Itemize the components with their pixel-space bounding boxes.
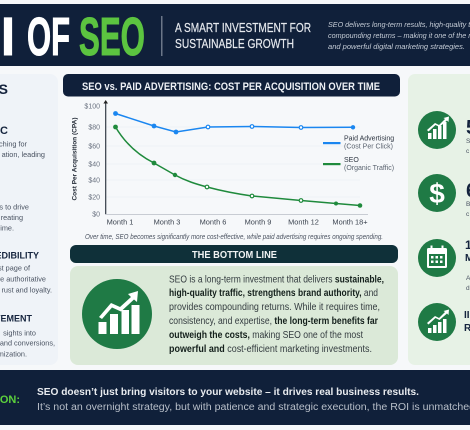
benefit: traffic xyxy=(0,125,45,159)
subtitle xyxy=(175,21,311,51)
stat: roi xyxy=(418,111,470,155)
stat: roi: c xyxy=(466,148,470,155)
benefit: improvement xyxy=(0,314,55,358)
panel: key stats (right) xyxy=(408,74,470,365)
icon: dollar: $ xyxy=(429,178,445,209)
x axis labels: Month 1 xyxy=(107,218,133,226)
title: SEO xyxy=(79,7,145,67)
benefit: traffic: ation, leading xyxy=(2,150,45,159)
legend: (Cost Per Click) xyxy=(344,144,393,150)
x axis labels xyxy=(107,218,368,226)
bottom line heading xyxy=(70,245,398,263)
bottom line text: powerful and cost-efficient marketing investments. xyxy=(169,344,372,355)
benefit: compounding: reating xyxy=(1,213,23,222)
y axis xyxy=(72,100,368,218)
y axis: $60 xyxy=(88,144,100,150)
benefit: traffic: C xyxy=(0,125,8,137)
title: OF xyxy=(27,7,70,67)
stat: returns xyxy=(418,303,470,341)
stat: returns: II xyxy=(464,310,470,321)
header description xyxy=(328,20,470,51)
legend: SEO xyxy=(344,157,359,164)
benefit: improvement: sights into xyxy=(3,328,36,338)
footer text: SEO doesn’t just bring visitors to your website – it drives real business results. xyxy=(37,387,419,398)
icon: growth chart small xyxy=(418,111,456,149)
chart heading: SEO vs. PAID ADVERTISING: COST PER ACQUISITION OVER TIME xyxy=(82,81,380,93)
stat: timeline xyxy=(418,238,470,292)
series: seo xyxy=(113,125,362,208)
y axis: $40 xyxy=(88,178,100,184)
x axis labels: Month 12 xyxy=(288,218,319,226)
title xyxy=(1,7,145,67)
title: I xyxy=(1,7,15,67)
footer text: It’s not an overnight strategy, but with patience and strategic execution, the ROI is unmatched. xyxy=(37,402,470,413)
footer label: ON: xyxy=(0,394,20,406)
y axis: $80 xyxy=(88,124,100,132)
icon: growth chart xyxy=(82,279,152,349)
benefit: credibility xyxy=(0,250,52,294)
stat: timeline: d xyxy=(466,285,470,292)
header description: and powerful digital marketing strategies. xyxy=(328,42,465,51)
header banner xyxy=(0,4,470,67)
series: paid advertising xyxy=(113,111,355,134)
y axis: Cost Per Acquisition (CPA) xyxy=(72,117,78,201)
x axis labels: Month 18+ xyxy=(332,218,368,226)
benefit: compounding: ime. xyxy=(0,224,14,232)
benefit: credibility: rust and loyalty. xyxy=(1,286,52,294)
legend: Paid Advertising xyxy=(344,136,394,142)
y axis: $0 xyxy=(92,212,100,218)
icon: calendar xyxy=(418,239,456,277)
y axis: $100 xyxy=(84,104,100,110)
bottom line text: high-quality traffic, strengthens brand authority, and xyxy=(169,288,378,299)
bottom line text: provides compounding returns. While it requires time, xyxy=(169,302,380,313)
x axis labels: Month 6 xyxy=(200,218,226,226)
panel: bottom line xyxy=(70,266,398,365)
stat: cost xyxy=(418,174,470,218)
bottom line text: SEO is a long-term investment that delivers sustainable, xyxy=(169,274,384,286)
x axis labels: Month 9 xyxy=(245,218,271,226)
footer text xyxy=(37,387,470,413)
bottom line text: consistency, and expertise, the long-term benefits far xyxy=(169,316,378,327)
subtitle: SUSTAINABLE GROWTH xyxy=(175,37,294,51)
line chart xyxy=(72,100,394,241)
stat: cost: c xyxy=(466,211,470,218)
chart caption: Over time, SEO becomes significantly more cost-effective, while paid advertising requires ongoing spending. xyxy=(85,234,383,241)
legend: (Organic Traffic) xyxy=(344,165,394,172)
bottom line heading: THE BOTTOM LINE xyxy=(192,249,277,261)
benefit: improvement: and conversions, xyxy=(0,338,55,348)
panel: benefits (left) xyxy=(0,74,58,365)
bottom line text: outweigh the costs, making SEO one of the most xyxy=(169,330,363,341)
x axis labels: Month 3 xyxy=(154,218,180,226)
benefit: compounding xyxy=(0,202,29,232)
legend xyxy=(323,136,394,172)
bottom line text xyxy=(169,274,384,355)
subtitle: A SMART INVESTMENT FOR xyxy=(175,21,311,35)
footer banner xyxy=(0,370,470,425)
y axis: $20 xyxy=(88,194,100,202)
icon: growth chart small xyxy=(418,303,456,341)
y axis: $40 xyxy=(88,162,100,168)
chart heading xyxy=(63,74,400,96)
benefit: compounding: s to drive xyxy=(0,202,29,212)
